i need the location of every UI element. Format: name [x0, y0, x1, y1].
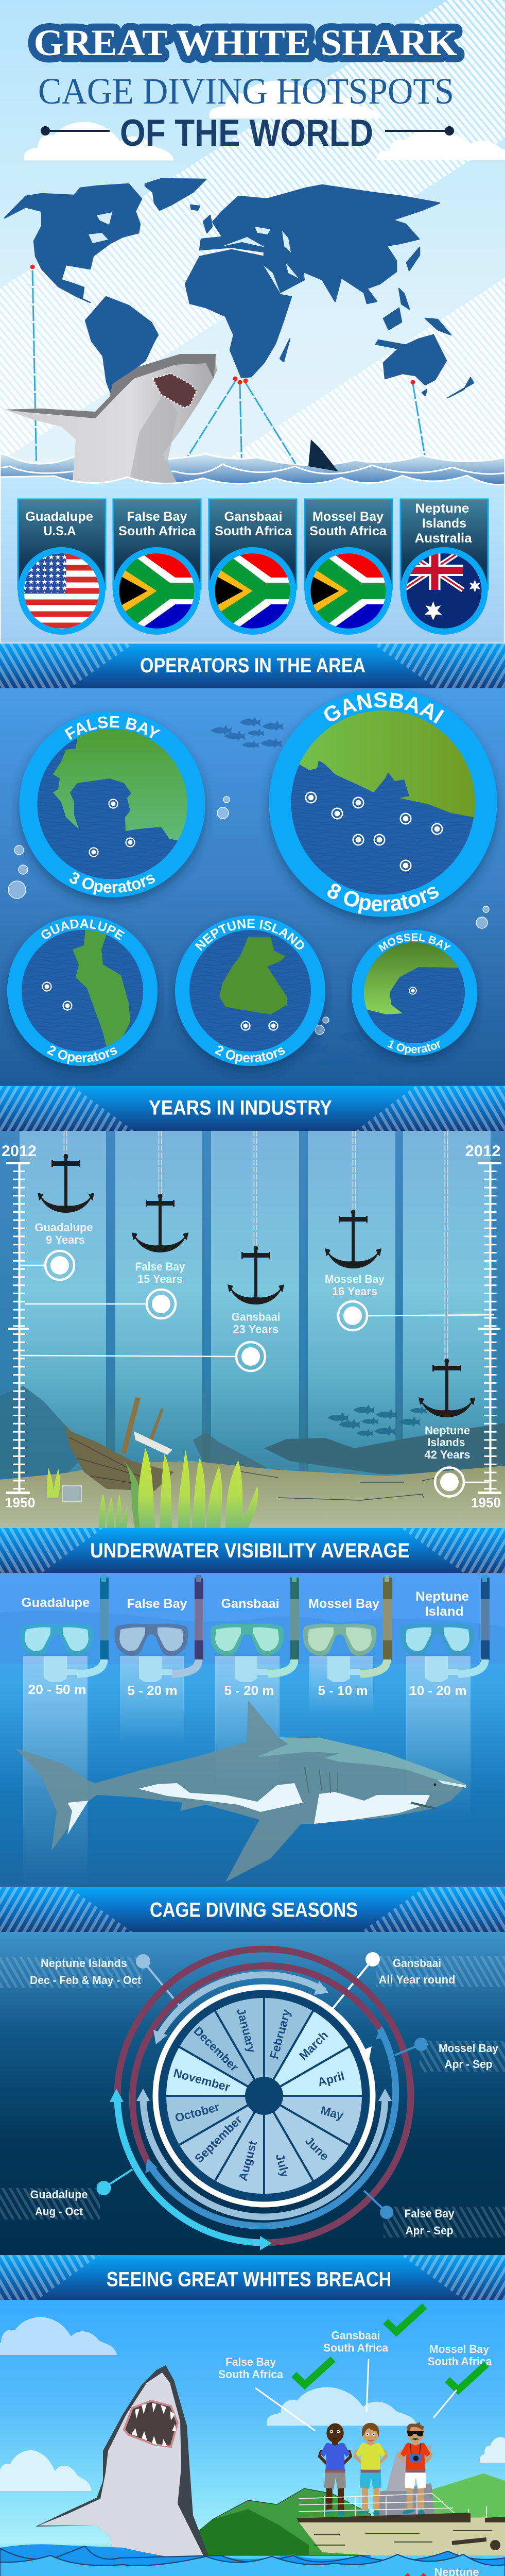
circle: mossel bay 1 operator: 1 Operator — [387, 1041, 440, 1055]
panel: neptune islands australia — [400, 499, 488, 632]
operators background — [0, 688, 505, 1086]
anchor: mossel bay 16 years — [325, 1131, 494, 1330]
mask: false bay 5 - 20 m — [115, 1575, 203, 1698]
mask: gansbaai 5 - 20 m: Gansbaai — [221, 1597, 279, 1611]
circle: false bay 3 operators: FALSE BAY — [64, 716, 161, 740]
illustration: shipwreck — [63, 1397, 174, 1501]
circle: guadalupe 2 operators — [2, 916, 163, 1075]
circle: guadalupe 2 operators: 2 Operators — [47, 1046, 117, 1064]
wave front — [0, 476, 505, 643]
callout: mossel bay — [395, 2038, 505, 2072]
label: mossel bay check: Mossel Bay — [429, 2343, 490, 2355]
heading: operators in the area — [0, 643, 505, 688]
anchor: false bay 15 years: False Bay — [135, 1260, 185, 1273]
callout: gansbaai — [332, 1952, 505, 2009]
heading: operators in the area: OPERATORS IN THE AREA — [140, 654, 365, 677]
heading: seeing great whites breach: SEEING GREAT WHITES BREACH — [107, 2268, 391, 2291]
anchor: false bay 15 years: 15 Years — [137, 1273, 183, 1285]
chart: month wheel: January — [234, 2007, 259, 2054]
mask: false bay 5 - 20 m: False Bay — [127, 1597, 187, 1611]
callout: guadalupe — [0, 2170, 132, 2219]
mask: guadalupe 20 - 50 m: 20 - 50 m — [28, 1683, 86, 1697]
ruler right: 1950 — [471, 1495, 501, 1511]
hills — [200, 2473, 505, 2555]
label: mossel bay check — [427, 2343, 492, 2418]
anchor: gansbaai 23 years: 23 Years — [233, 1323, 279, 1335]
circle: false bay 3 operators: 3 Operators — [69, 872, 155, 895]
anchor: neptune islands 42 years: 42 Years — [424, 1448, 471, 1461]
circle: mossel bay 1 operator — [347, 930, 482, 1064]
chart: month wheel: November — [172, 2066, 232, 2094]
anchor: false bay 15 years — [25, 1131, 188, 1318]
illustration: breaching shark — [5, 354, 217, 484]
illustration: boat with spectators — [297, 2422, 505, 2555]
chart: month wheel: June — [303, 2134, 332, 2163]
circle: gansbaai 8 operators: 8 Operators — [327, 884, 439, 914]
circle: neptune island 2 operators: NEPTUNE ISLAND — [195, 919, 304, 951]
label: false bay check: False Bay — [225, 2355, 276, 2368]
callout: gansbaai: All Year round — [379, 1973, 455, 1986]
seaweed — [47, 1448, 258, 1528]
subtitle: cage diving hotspots: CAGE DIVING HOTSPOTS — [38, 71, 454, 112]
circle: gansbaai 8 operators: GANSBAAI — [324, 692, 444, 723]
anchor: gansbaai 23 years — [21, 1131, 284, 1371]
wave back — [0, 453, 505, 487]
panel: guadalupe u.s.a: U.S.A — [43, 524, 76, 538]
mask: neptune island 10 - 20 m — [401, 1575, 490, 1698]
label: false bay check — [218, 2355, 333, 2431]
circle: false bay 3 operators — [13, 710, 211, 908]
label: gansbaai check: Gansbaai — [332, 2329, 380, 2342]
chart: season rings — [110, 1949, 411, 2250]
hero background — [0, 0, 505, 487]
mask: neptune island 10 - 20 m: Island — [425, 1604, 463, 1619]
heading: seeing great whites breach — [0, 2255, 505, 2300]
heading: years in industry: YEARS IN INDUSTRY — [149, 1096, 332, 1119]
callout: neptune islands: Dec - Feb & May - Oct — [30, 1974, 142, 1987]
heading: underwater visibility average: UNDERWATER VISIBILITY AVERAGE — [90, 1539, 410, 1562]
panel: guadalupe u.s.a — [18, 499, 106, 632]
panel: neptune islands australia: Australia — [415, 531, 473, 546]
callout: false bay — [364, 2191, 505, 2238]
circle: guadalupe 2 operators: GUADALUPE — [41, 919, 125, 941]
panel: gansbaai south africa: Gansbaai — [224, 510, 282, 524]
mask: mossel bay 5 - 10 m — [303, 1575, 392, 1698]
callout: neptune islands — [0, 1954, 181, 2008]
label: false bay check: South Africa — [218, 2368, 284, 2381]
ruler left: 1950 — [5, 1495, 35, 1511]
callout: gansbaai: Gansbaai — [393, 1957, 441, 1970]
chart: month wheel: August — [236, 2139, 259, 2182]
anchor: neptune islands 42 years: Neptune — [425, 1424, 470, 1437]
label: gansbaai check: South Africa — [323, 2341, 389, 2354]
panel: neptune islands australia: Islands — [422, 516, 466, 531]
mask: mossel bay 5 - 10 m: Mossel Bay — [308, 1597, 379, 1611]
visibility background — [0, 1573, 505, 1887]
panel: neptune islands australia: Neptune — [415, 501, 469, 516]
heading: underwater visibility average — [0, 1528, 505, 1573]
chart: month wheel: April — [316, 2069, 346, 2089]
anchor: gansbaai 23 years: Gansbaai — [232, 1311, 280, 1323]
anchor: guadalupe 9 years: 9 Years — [46, 1233, 85, 1246]
heading: cage diving seasons — [0, 1887, 505, 1932]
panel: gansbaai south africa — [209, 499, 297, 632]
mask: gansbaai 5 - 20 m — [211, 1575, 299, 1698]
callout: mossel bay: Mossel Bay — [439, 2042, 499, 2055]
breach background — [0, 2300, 505, 2576]
chart: month wheel: May — [319, 2104, 345, 2122]
anchor: neptune islands 42 years — [419, 1131, 489, 1496]
ruler left: 2012 — [2, 1143, 37, 1160]
callout: mossel bay: Apr - Sep — [445, 2058, 492, 2071]
callout: guadalupe: Guadalupe — [30, 2188, 88, 2201]
callout: guadalupe: Aug - Oct — [35, 2205, 83, 2218]
mask: neptune island 10 - 20 m: Neptune — [415, 1589, 469, 1604]
mask: neptune island 10 - 20 m: 10 - 20 m — [410, 1684, 466, 1698]
chart: month wheel: February — [267, 2008, 293, 2060]
clouds behind title — [24, 80, 505, 160]
heading: cage diving seasons: CAGE DIVING SEASONS — [150, 1899, 358, 1922]
callout: false bay: Apr - Sep — [406, 2224, 453, 2237]
panel: false bay south africa — [113, 499, 201, 632]
mask: mossel bay 5 - 10 m: 5 - 10 m — [318, 1684, 368, 1698]
anchor: mossel bay 16 years: Mossel Bay — [325, 1273, 385, 1285]
mask: guadalupe 20 - 50 m: Guadalupe — [22, 1596, 90, 1610]
panel: gansbaai south africa: South Africa — [215, 524, 292, 538]
subtitle: of the world: OF THE WORLD — [120, 112, 373, 154]
circle: neptune island 2 operators — [170, 916, 330, 1075]
wave middle — [0, 464, 505, 489]
ruler left — [2, 1143, 37, 1511]
chart: month wheel: July — [273, 2152, 292, 2179]
route dots and dashed lines — [30, 265, 432, 499]
circle: mossel bay 1 operator: MOSSEL BAY — [378, 934, 451, 952]
panel: guadalupe u.s.a: Guadalupe — [25, 510, 93, 524]
chart: month wheel: March — [297, 2028, 330, 2062]
label: gansbaai check — [323, 2306, 425, 2412]
circle: gansbaai 8 operators — [264, 688, 502, 927]
ruler right: 2012 — [465, 1143, 500, 1160]
label: mossel bay check: South Africa — [427, 2355, 492, 2368]
panel: false bay south africa: South Africa — [118, 524, 196, 538]
panel: mossel bay south africa: Mossel Bay — [312, 510, 384, 524]
callout: false bay: False Bay — [405, 2207, 455, 2220]
anchor: guadalupe 9 years — [21, 1131, 94, 1280]
title: great white shark: GREAT WHITE SHARK — [34, 22, 457, 63]
icon: shark fin — [308, 439, 338, 471]
waves — [0, 2544, 505, 2576]
chart: month wheel: December — [191, 2024, 241, 2074]
chart: month wheel: September — [192, 2113, 245, 2165]
heading: years in industry — [0, 1086, 505, 1131]
anchor: guadalupe 9 years: Guadalupe — [35, 1221, 93, 1234]
panel: mossel bay south africa: South Africa — [309, 524, 387, 538]
circle: neptune island 2 operators: 2 Operators — [215, 1046, 285, 1064]
chart: month wheel — [159, 1990, 370, 2201]
world map — [5, 179, 474, 398]
anchor: mossel bay 16 years: 16 Years — [332, 1285, 377, 1298]
panel: false bay south africa: False Bay — [127, 510, 187, 524]
seasons background — [0, 1932, 505, 2255]
anchor: neptune islands 42 years: Islands — [427, 1436, 465, 1449]
ruler right — [465, 1143, 501, 1511]
years background with sea floor — [0, 1131, 505, 1528]
illustration: great white shark — [15, 1700, 467, 1882]
chart: month wheel: October — [173, 2100, 221, 2125]
label: neptune islands cross — [405, 2566, 482, 2576]
mask: gansbaai 5 - 20 m: 5 - 20 m — [224, 1684, 274, 1698]
mask: guadalupe 20 - 50 m — [20, 1575, 109, 1697]
clouds — [0, 2317, 505, 2491]
panel: mossel bay south africa — [305, 499, 392, 632]
illustration: breaching shark front view — [36, 2365, 210, 2563]
mask: false bay 5 - 20 m: 5 - 20 m — [128, 1684, 177, 1698]
callout: neptune islands: Neptune Islands — [41, 1957, 127, 1970]
